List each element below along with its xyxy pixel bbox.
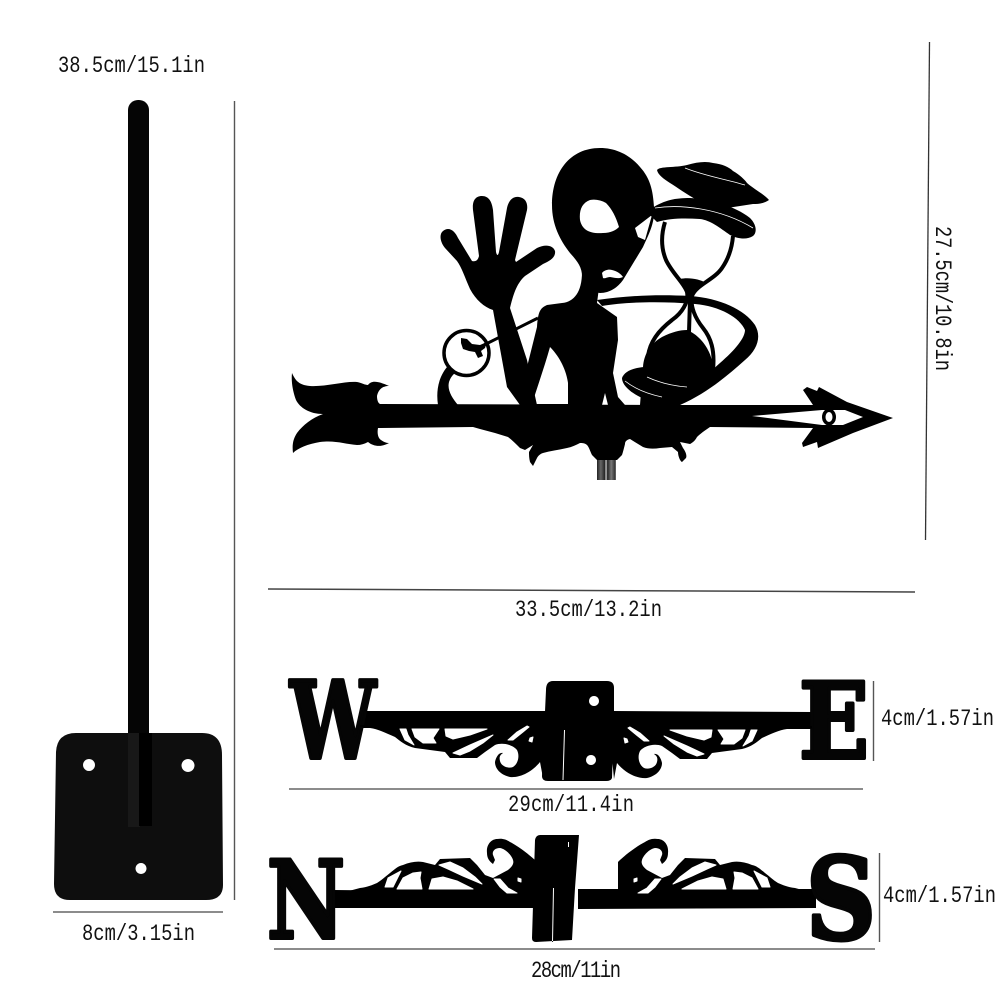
right ornament cutouts	[624, 727, 757, 756]
left scroll ornament	[360, 725, 548, 778]
bar	[334, 889, 816, 909]
dimension: vane height line	[926, 42, 930, 540]
panel: north-south direction arm	[267, 833, 876, 966]
dimension: NS width line	[274, 948, 875, 950]
hourglass sand	[640, 278, 713, 405]
panel: alien weathervane	[292, 148, 893, 480]
dimension: NS height line	[878, 853, 880, 942]
dimension: pole height line	[234, 101, 236, 900]
panel: west-east direction arm	[289, 659, 869, 784]
hourglass glass outline	[648, 222, 733, 370]
bracket	[128, 733, 152, 827]
hourglass top cap	[650, 198, 756, 239]
pole	[128, 100, 149, 760]
label: plate width: 8cm/3.15in	[82, 921, 195, 948]
base plate	[54, 733, 223, 900]
letter W: W	[289, 659, 377, 784]
letter N: N	[267, 838, 345, 964]
left ornament cutouts	[400, 726, 533, 755]
dimension: WE height line	[872, 681, 874, 761]
dimension: vane width line	[268, 589, 915, 592]
label: WE width: 29cm/11.4in	[508, 792, 634, 819]
right ornament cutouts	[634, 862, 770, 893]
arrowhead eye	[822, 408, 836, 426]
alien hand and arm	[441, 196, 555, 405]
pole stub	[597, 455, 616, 480]
label: vane width: 33.5cm/13.2in	[515, 597, 662, 624]
alien head	[552, 148, 654, 293]
letter S: S	[806, 833, 876, 966]
dimension: WE width line	[289, 788, 863, 790]
left ornament cutouts	[385, 862, 521, 893]
left scroll ornament	[345, 839, 537, 892]
hinge plate	[532, 835, 579, 942]
globe on rod	[437, 318, 538, 405]
label: WE height: 4cm/1.57in	[881, 706, 994, 733]
label: pole length: 38.5cm/15.1in	[58, 53, 205, 80]
label: vane height: 27.5cm/10.8in	[928, 226, 955, 371]
panel: mounting pole and base plate	[54, 100, 223, 900]
letter E: E	[799, 659, 869, 783]
alien torso	[520, 272, 625, 405]
right scroll ornament	[609, 726, 812, 779]
label: NS height: 4cm/1.57in	[883, 883, 996, 910]
dimension: plate width line	[53, 911, 223, 913]
label: NS width: 28cm/11in	[531, 958, 621, 985]
bar	[362, 711, 812, 729]
orbit ring	[597, 295, 758, 405]
arrow shaft with fletching and head	[292, 373, 893, 466]
right scroll ornament	[618, 839, 810, 892]
flying saucer	[657, 162, 769, 208]
hourglass bottom cap	[622, 367, 700, 405]
hinge plate	[542, 681, 614, 781]
